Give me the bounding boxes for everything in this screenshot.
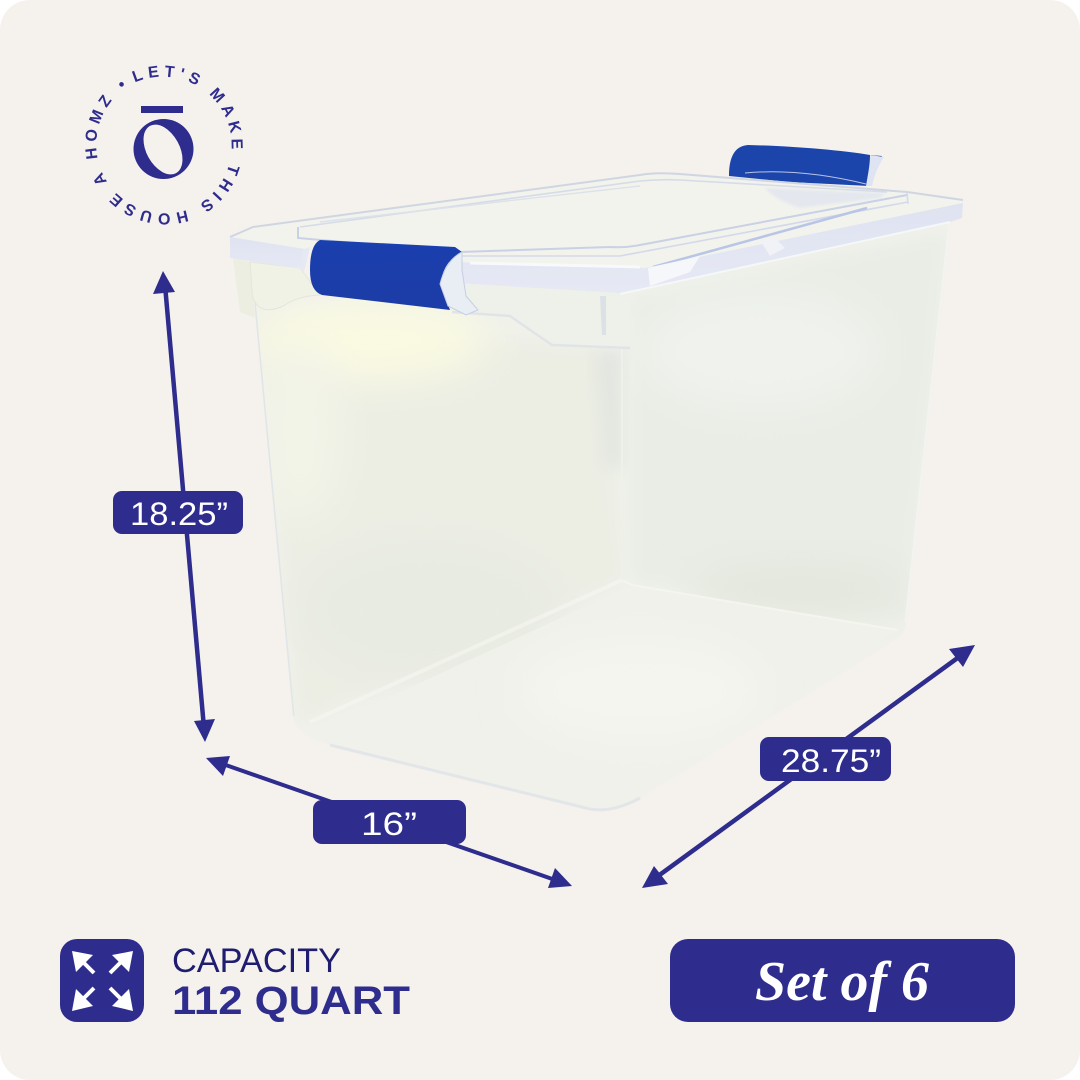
left corner block	[233, 258, 255, 318]
label: width	[313, 800, 466, 844]
bin shading	[250, 222, 950, 720]
capacity value: 112 QUART	[172, 979, 410, 1023]
corner moulding	[450, 278, 630, 348]
lid shadow	[765, 188, 885, 208]
back latch clip	[729, 145, 884, 186]
lid top	[230, 174, 964, 268]
arrow: depth	[642, 645, 975, 888]
lid edge lines	[230, 173, 963, 267]
arrow: width	[206, 756, 572, 888]
label: depth: 28.75”	[781, 743, 881, 779]
label: width: 16”	[361, 806, 417, 842]
logo badge	[85, 66, 243, 225]
circular slogan: LET'S MAKE THIS HOUSE A HOMZ •	[85, 66, 243, 225]
set of 6 badge	[670, 939, 1015, 1022]
lid front rim	[230, 237, 305, 269]
front latch clip	[301, 240, 478, 315]
capacity label: CAPACITY	[172, 942, 341, 980]
label: height	[113, 491, 243, 534]
icon: capacity arrows	[60, 939, 144, 1022]
label: height: 18.25”	[130, 496, 228, 532]
bin floor	[310, 348, 897, 810]
logo mark	[134, 106, 194, 181]
label: depth	[760, 737, 891, 781]
bin body	[254, 222, 950, 810]
set of 6 badge: Set of 6	[755, 951, 929, 1013]
arrow: height	[153, 271, 215, 742]
storage bin photo	[230, 145, 964, 810]
